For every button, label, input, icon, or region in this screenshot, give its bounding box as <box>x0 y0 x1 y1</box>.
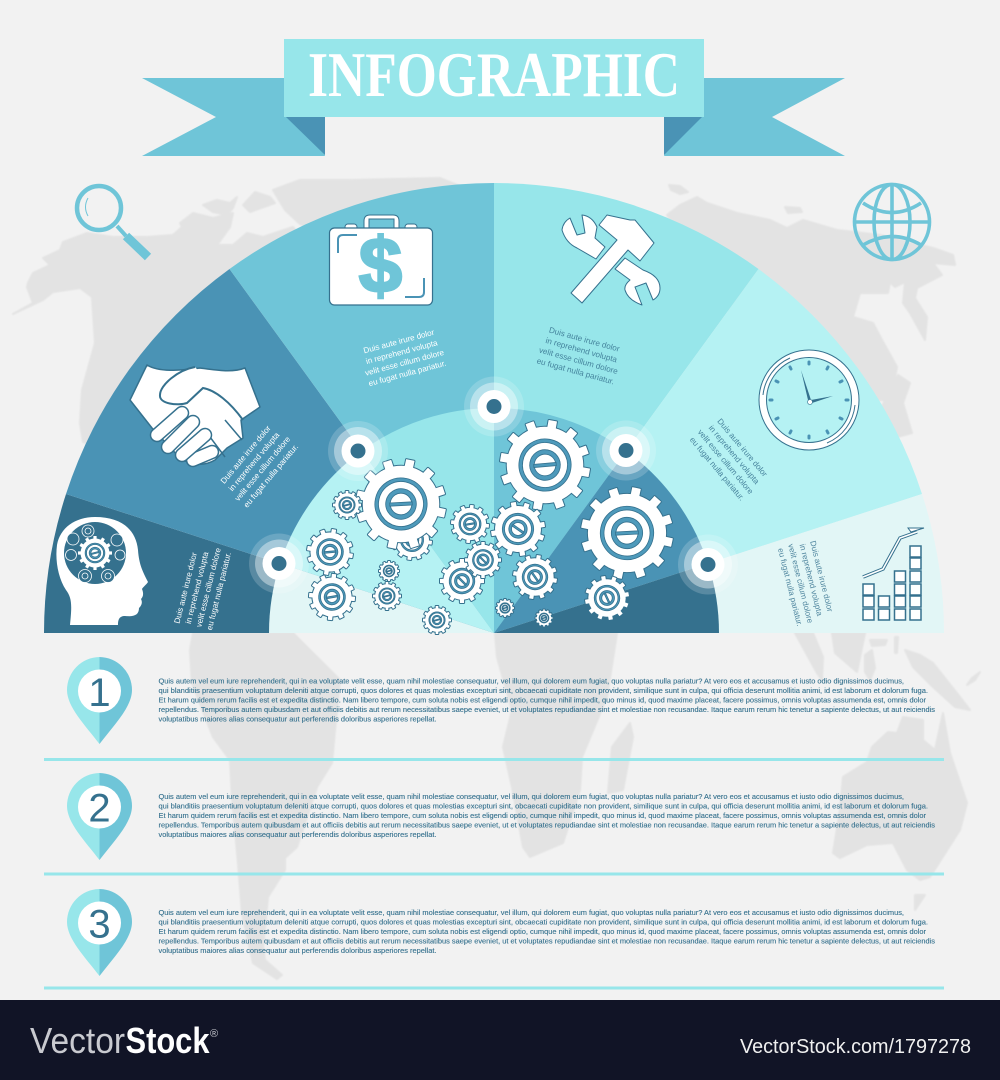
text: sector 2: in reprehend volupta <box>227 430 282 493</box>
text: sector 4: Duis aute irure dolor <box>548 326 621 354</box>
text block 3 <box>158 908 935 955</box>
pin 2: 2 <box>88 786 111 830</box>
footer logo: ® <box>210 1028 218 1040</box>
text: sector 5: in reprehend volupta <box>707 424 761 486</box>
node 3 <box>464 376 524 436</box>
node 5 <box>678 534 738 594</box>
text: sector 1: Duis aute irure dolor <box>173 551 199 624</box>
text: sector 2: velit esse cillum dolore <box>233 434 293 503</box>
text: sector 1 <box>173 541 234 632</box>
text: sector 2 <box>216 420 301 510</box>
text: sector 6: in reprehend volupta <box>798 543 824 617</box>
text block 1: repellendus. Temporibus autem quibusdam et aut officiis debitis aut rerum necessitatibus saepe eveniet, ut et voluptates repudiandae sint et molestiae non recusandae. Itaque earum rerum hic tenetur a sapiente delectus, ut aut reiciendis <box>158 705 935 714</box>
node 2 <box>328 421 388 481</box>
pin 3: 3 <box>88 902 111 946</box>
text block 1: qui blanditiis praesentium voluptatum deleniti atque corrupti, quos dolores et quas molestias excepturi sint, obcaecati cupiditate non provident, similique sunt in culpa, qui officia deserunt mollitia animi, id est laborum et dolorum fuga. <box>158 686 928 695</box>
node 4 <box>596 420 656 480</box>
text: sector 4 <box>535 324 625 387</box>
left ribbon fold <box>286 117 325 155</box>
text block 3: Quis autem vel eum iure reprehenderit, qui in ea voluptate velit esse, quam nihil molestiae consequatur, vel illum, qui dolorem eum fugiat, quo voluptas nulla pariatur? At vero eos et accusamus et iusto odio dignissimos ducimus, <box>158 908 904 917</box>
footer logo: Stock <box>126 1020 210 1061</box>
text block 1 <box>158 676 935 724</box>
pin 2 <box>67 773 132 860</box>
text: sector 6: eu fugat nulla pariatur. <box>776 547 804 627</box>
banner plate <box>284 39 704 117</box>
text block 3: qui blanditiis praesentium voluptatum deleniti atque corrupti, quos dolores et quas molestias excepturi sint, obcaecati cupiditate non provident, similique sunt in culpa, qui officia deserunt mollitia animi, id est laborum et dolorum fuga. <box>158 918 928 926</box>
text block 2: Et harum quidem rerum facilis est et expedita distinctio. Nam libero tempore, cum soluta nobis est eligendi optio, cumque nihil impedit, quo minus id, quod maxime placeat, facere possimus, omnis voluptas assumenda est, omnis dolor <box>158 811 927 820</box>
icon: handshake <box>130 365 260 464</box>
fan chart: inner sectors <box>269 408 719 633</box>
text: sector 1: velit esse cillum dolore <box>194 546 223 628</box>
text block 2: qui blanditiis praesentium voluptatum deleniti atque corrupti, quos dolores et quas molestias excepturi sint, obcaecati cupiditate non provident, similique sunt in culpa, qui officia deserunt mollitia animi, id est laborum et dolorum fuga. <box>158 802 928 810</box>
icon: globe <box>854 184 930 260</box>
text block 1: Quis autem vel eum iure reprehenderit, qui in ea voluptate velit esse, quam nihil molestiae consequatur, vel illum, qui dolorem eum fugiat, quo voluptas nulla pariatur? At vero eos et accusamus et iusto odio dignissimos ducimus, <box>158 676 904 686</box>
pin 3 <box>67 889 132 976</box>
text: sector 5: velit esse cillum dolore <box>696 428 755 496</box>
left ribbon tail <box>142 78 325 156</box>
text block 2: Quis autem vel eum iure reprehenderit, qui in ea voluptate velit esse, quam nihil molestiae consequatur, vel illum, qui dolorem eum fugiat, quo voluptas nulla pariatur? At vero eos et accusamus et iusto odio dignissimos ducimus, <box>158 792 904 801</box>
icon: briefcase with dollar <box>330 215 432 309</box>
banner ribbon <box>142 39 845 156</box>
text: sector 1: eu fugat nulla pariatur. <box>205 551 233 631</box>
text: sector 6: Duis aute irure dolor <box>808 540 835 613</box>
text block 1: voluptatibus maiores alias consequatur aut perferendis doloribus asperiores repellat. <box>158 714 436 724</box>
text: sector 3: velit esse cillum dolore <box>364 348 446 378</box>
world map <box>13 178 980 979</box>
text: sector 6: velit esse cillum dolore <box>786 543 815 625</box>
fan chart: outer sectors <box>44 183 944 633</box>
text block 3: voluptatibus maiores alias consequatur aut perferendis doloribus asperiores repellat. <box>158 946 436 955</box>
section 1 <box>67 657 935 744</box>
gears cluster <box>303 413 682 634</box>
right ribbon tail <box>664 78 845 156</box>
footer url: VectorStock.com/1797278 <box>740 1036 971 1058</box>
node 1 <box>249 534 309 594</box>
text: sector 2: eu fugat nulla pariatur. <box>242 442 300 510</box>
text: sector 4: eu fugat nulla pariatur. <box>536 356 615 386</box>
text: sector 2: Duis aute irure dolor <box>219 424 273 486</box>
icon: clock <box>759 350 859 450</box>
text block 2: repellendus. Temporibus autem quibusdam et aut officiis debitis aut rerum necessitatibus saepe eveniet, ut et voluptates repudiandae sint et molestiae non recusandae. Itaque earum rerum hic tenetur a sapiente delectus, ut aut reiciendis <box>158 820 935 830</box>
footer logo <box>30 1020 218 1061</box>
icon: magnifier <box>77 186 148 257</box>
text block 3: Et harum quidem rerum facilis est et expedita distinctio. Nam libero tempore, cum soluta nobis est eligendi optio, cumque nihil impedit, quo minus id, quod maxime placeat, facere possimus, omnis voluptas assumenda est, omnis dolor <box>158 927 927 936</box>
text: sector 1: in reprehend volupta <box>184 550 211 625</box>
icon: bar chart with arrow <box>863 528 924 620</box>
text block 2 <box>158 792 935 839</box>
footer logo: Vector <box>30 1020 125 1061</box>
section 2 <box>67 773 935 860</box>
pin 1 <box>67 657 132 744</box>
pin 1: 1 <box>88 671 111 715</box>
title: INFOGRAPHIC <box>308 39 680 110</box>
text block 1: Et harum quidem rerum facilis est et expedita distinctio. Nam libero tempore, cum soluta nobis est eligendi optio, cumque nihil impedit, quo minus id, quod maxime placeat, facere possimus, omnis voluptas assumenda est, omnis dolor <box>158 696 927 704</box>
text: sector 5: eu fugat nulla pariatur. <box>688 435 746 503</box>
node markers <box>249 376 738 594</box>
text: sector 5 <box>687 414 772 503</box>
icon: briefcase with dollar: $ <box>359 221 402 309</box>
text block 3: repellendus. Temporibus autem quibusdam et aut officiis debitis aut rerum necessitatibus saepe eveniet, ut et voluptates repudiandae sint et molestiae non recusandae. Itaque earum rerum hic tenetur a sapiente delectus, ut aut reiciendis <box>158 936 935 946</box>
right ribbon fold <box>664 117 702 155</box>
icon: hammer and wrench <box>562 215 660 305</box>
text block 2: voluptatibus maiores alias consequatur aut perferendis doloribus asperiores repellat. <box>158 830 436 839</box>
text: sector 4: velit esse cillum dolore <box>538 346 619 376</box>
text: sector 3 <box>358 327 448 388</box>
text: sector 3: Duis aute irure dolor <box>362 328 436 355</box>
text: sector 4: in reprehend volupta <box>545 336 619 365</box>
text: sector 3: in reprehend volupta <box>365 338 439 366</box>
text: sector 5: Duis aute irure dolor <box>715 417 769 479</box>
icon: head with gears <box>56 517 148 625</box>
text: sector 6 <box>776 538 836 627</box>
text: sector 3: eu fugat nulla pariatur. <box>368 359 447 388</box>
section 3 <box>67 889 935 976</box>
footer bar <box>0 1000 1000 1080</box>
